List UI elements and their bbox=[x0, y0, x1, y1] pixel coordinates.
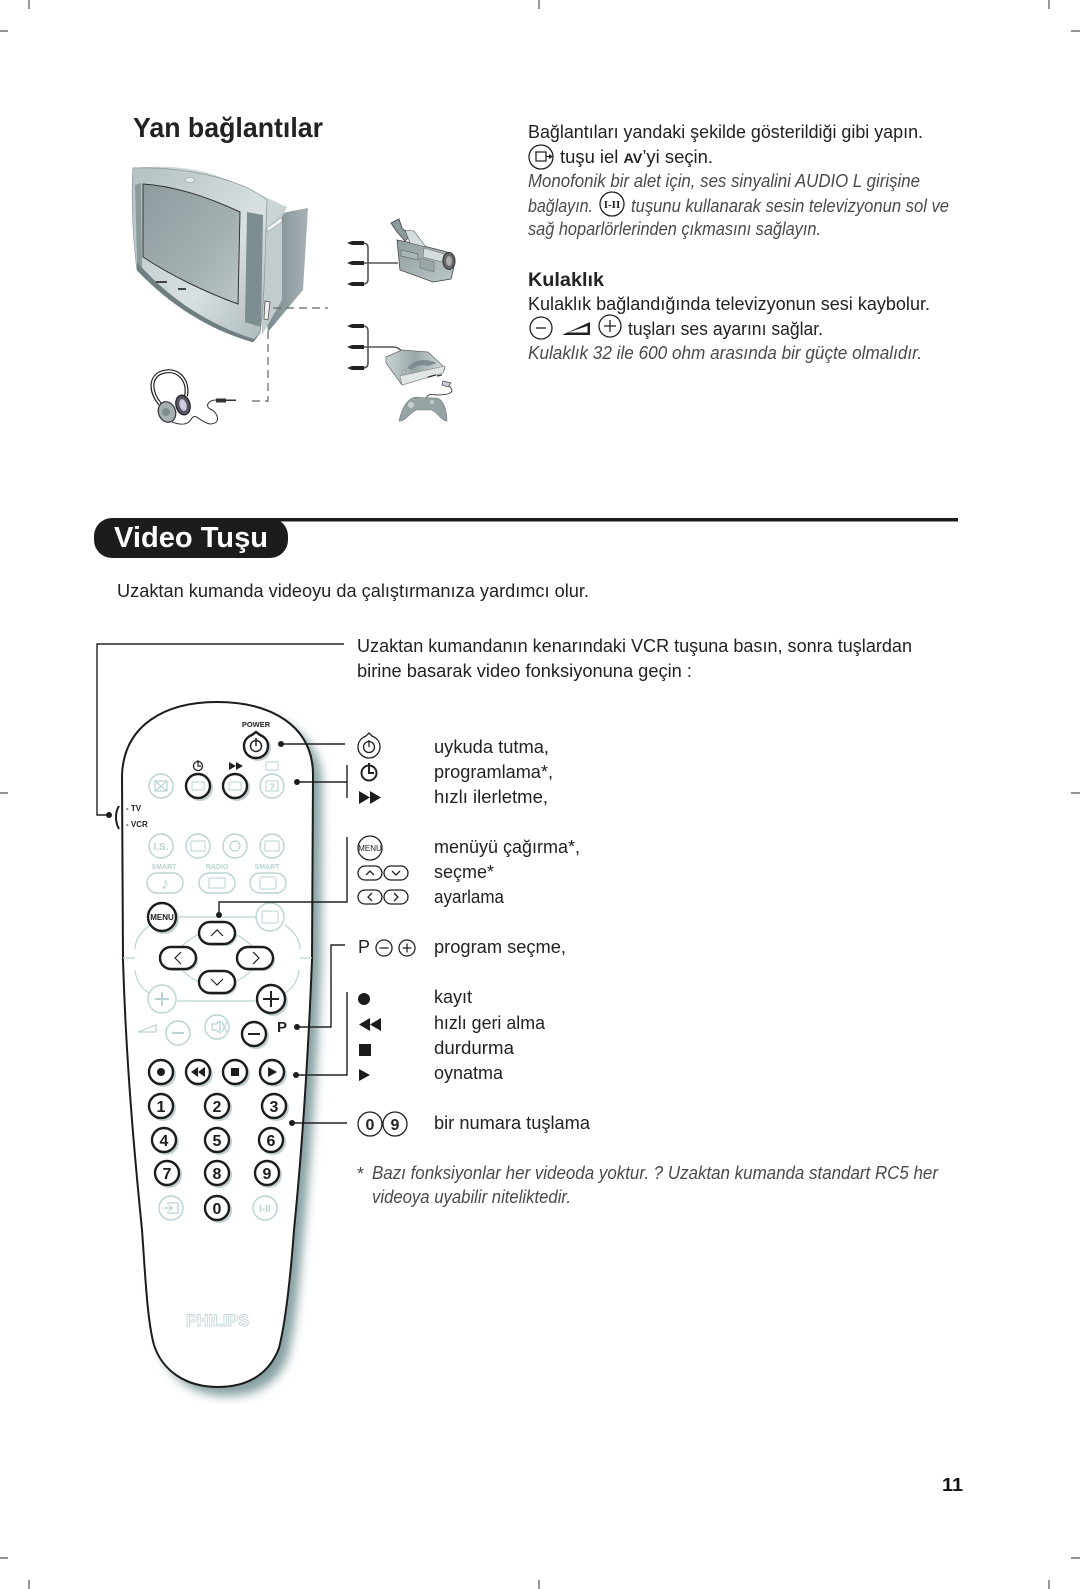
icon: menu bbox=[358, 836, 382, 860]
instruction line: AV: tuşu iel AV’yi seçin. bbox=[560, 147, 713, 167]
bottom light buttons: I-II bbox=[259, 1204, 271, 1215]
icon: record bbox=[358, 993, 370, 1005]
footnote: videoya uyabilir niteliktedir. bbox=[372, 1187, 571, 1207]
note: stereo button: tuşunu kullanarak sesin televizyonun sol ve bbox=[631, 196, 949, 216]
light button row bbox=[149, 834, 284, 858]
number buttons: 6 bbox=[267, 1133, 276, 1150]
icon: power bbox=[358, 733, 380, 758]
label: seçme: seçme* bbox=[434, 862, 494, 882]
icon: fast forward bbox=[359, 791, 381, 804]
icon: P minus plus bbox=[358, 937, 415, 957]
note: impedance: Kulaklık 32 ile 600 ohm arasında bir güçte olmalıdır. bbox=[528, 343, 922, 363]
icon: stop bbox=[359, 1044, 371, 1056]
note: mono device continued: bağlayın. bbox=[528, 196, 593, 216]
note: speakers: sağ hoparlörlerinden çıkmasını sağlayın. bbox=[528, 219, 821, 239]
legend: key functions bbox=[358, 733, 591, 1136]
label: programlama: programlama*, bbox=[434, 762, 553, 782]
icon: I-II button bbox=[600, 192, 624, 216]
smart and radio buttons bbox=[147, 873, 286, 893]
remote control bbox=[116, 702, 322, 1396]
smart and radio labels bbox=[152, 864, 280, 871]
top symbols: timer, fast forward, list bbox=[194, 760, 278, 770]
intro text: Uzaktan kumanda videoyu da çalıştırmanıza yardımcı olur. bbox=[117, 581, 589, 601]
label: hızlı ilerletme: hızlı ilerletme, bbox=[434, 787, 548, 807]
remote body bbox=[122, 702, 313, 1387]
icon: game console bbox=[386, 350, 445, 385]
label: bir numara tuşlama: bir numara tuşlama bbox=[434, 1113, 591, 1133]
icon: play bbox=[359, 1069, 370, 1081]
label: oynatma: oynatma bbox=[434, 1063, 504, 1083]
icon: rewind bbox=[359, 1018, 381, 1031]
footnote bbox=[357, 1163, 939, 1207]
number buttons: 4 bbox=[160, 1133, 169, 1150]
icon: up down bbox=[358, 866, 408, 880]
cables: game console bbox=[347, 324, 402, 370]
power button: POWER bbox=[242, 720, 271, 729]
label: durdurma: durdurma bbox=[434, 1038, 515, 1058]
cables: camcorder bbox=[347, 241, 398, 286]
number buttons: 0 bbox=[213, 1201, 222, 1218]
cursor buttons bbox=[160, 922, 275, 995]
label: uykuda tutma: uykuda tutma, bbox=[434, 737, 549, 757]
smart and radio labels: SMART bbox=[255, 864, 280, 871]
number buttons bbox=[149, 1094, 289, 1223]
label: hızlı geri alma: hızlı geri alma bbox=[434, 1013, 546, 1033]
bottom light buttons bbox=[159, 1196, 277, 1220]
instruction text: VCR key: Uzaktan kumandanın kenarındaki VCR tuşuna basın, sonra tuşlardan bbox=[357, 636, 912, 656]
light button row: I.S. bbox=[153, 842, 169, 853]
heading: Yan bağlantılar: Yan bağlantılar bbox=[133, 112, 323, 143]
icon: menu: MENU bbox=[358, 844, 382, 853]
power button bbox=[242, 720, 271, 761]
illustration: connections diagram bbox=[132, 167, 455, 425]
teletext button bbox=[256, 903, 284, 931]
label: program seçme: program seçme, bbox=[434, 937, 566, 957]
smart and radio buttons: ♪ bbox=[161, 874, 169, 893]
number buttons: 5 bbox=[213, 1133, 222, 1150]
logo: PHILIPS: PHILIPS bbox=[186, 1311, 249, 1330]
transport buttons bbox=[149, 1060, 287, 1087]
text block: connections bbox=[528, 122, 949, 363]
subheading: Kulaklık: Kulaklık bbox=[528, 270, 604, 291]
label: ayarlama: ayarlama bbox=[434, 887, 505, 907]
TV VCR switch bbox=[116, 804, 148, 829]
number buttons: 9 bbox=[263, 1166, 272, 1183]
icon: headphones bbox=[152, 371, 236, 425]
page number: 11 bbox=[942, 1475, 963, 1495]
icon: I-II button: I-II bbox=[604, 199, 620, 211]
icon: 0 and 9: 9 bbox=[391, 1117, 400, 1134]
footnote: Bazı fonksiyonlar her videoda yoktur. ? Uzaktan kumanda standart RC5 her bbox=[372, 1163, 939, 1183]
callout lines bbox=[97, 644, 347, 1126]
smart and radio labels: RADIO bbox=[206, 864, 229, 871]
number buttons: 8 bbox=[213, 1166, 222, 1183]
footnote: * bbox=[357, 1164, 364, 1184]
section header: Video Tuşu: Video Tuşu bbox=[114, 522, 268, 554]
TV VCR switch: - VCR bbox=[126, 820, 148, 829]
number buttons: 7 bbox=[163, 1166, 172, 1183]
TV VCR switch: - TV bbox=[126, 804, 142, 813]
smart and radio labels: SMART bbox=[152, 864, 177, 871]
icon: AV input button bbox=[529, 145, 553, 169]
button row: mute, timer, forward, help bbox=[149, 774, 284, 801]
remote shadow bbox=[131, 711, 322, 1396]
icon: 0 and 9 bbox=[358, 1112, 407, 1136]
instruction line: Bağlantıları yandaki şekilde gösterildiği gibi yapın. bbox=[528, 122, 923, 142]
volume text: tuşları ses ayarını sağlar. bbox=[628, 319, 823, 339]
volume and program buttons bbox=[138, 985, 288, 1049]
icon: 0 and 9: 0 bbox=[366, 1117, 375, 1134]
icon: volume buttons bbox=[530, 315, 621, 339]
menu button: MENU bbox=[150, 913, 174, 922]
note: mono device: Monofonik bir alet için, ses sinyalini AUDIO L girişine bbox=[528, 171, 920, 191]
instruction text: VCR key: birine basarak video fonksiyonuna geçin : bbox=[357, 661, 692, 681]
menu button bbox=[148, 903, 179, 934]
headphone sound text: Kulaklık bağlandığında televizyonun sesi kaybolur. bbox=[528, 294, 930, 314]
number buttons: 1 bbox=[157, 1099, 166, 1116]
number buttons: 3 bbox=[270, 1099, 279, 1116]
icon: camcorder bbox=[391, 219, 455, 282]
icon: timer bbox=[362, 763, 376, 780]
label: menüyü çağırma: menüyü çağırma*, bbox=[434, 837, 580, 857]
button row: mute, timer, forward, help: ? bbox=[269, 782, 275, 792]
number buttons: 2 bbox=[213, 1099, 222, 1116]
icon: game controller bbox=[399, 381, 452, 421]
label: kayıt: kayıt bbox=[434, 987, 472, 1007]
dashed connection lines bbox=[250, 308, 328, 401]
icon: left right bbox=[358, 890, 408, 904]
instruction text: VCR key bbox=[357, 636, 912, 681]
section header: Video Tuşu bbox=[94, 518, 958, 558]
navigation guide arcs bbox=[123, 917, 312, 1001]
illustration: television bbox=[132, 167, 308, 342]
icon: P minus plus: P bbox=[358, 937, 370, 957]
volume and program buttons: P bbox=[277, 1019, 287, 1036]
